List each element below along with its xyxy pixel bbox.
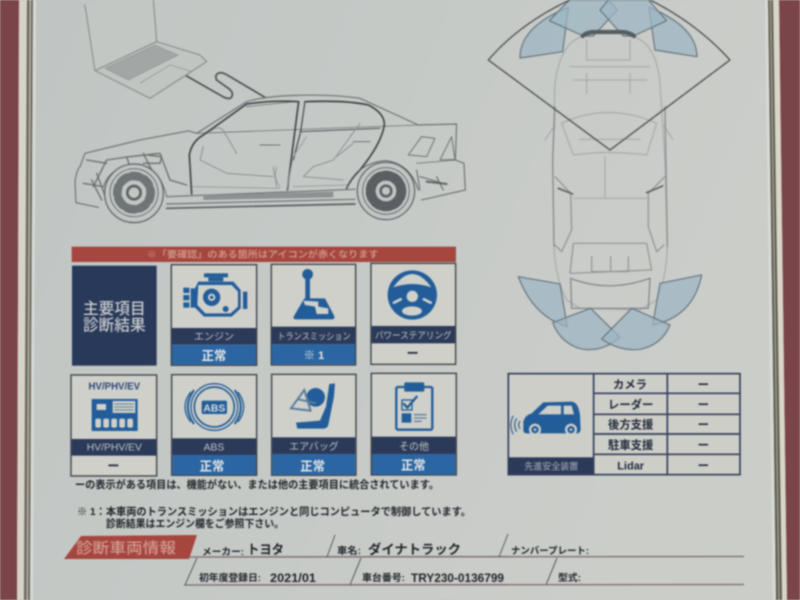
table row: parking assist — [608, 438, 709, 452]
icon: gear shifter — [293, 269, 335, 319]
icon: steering wheel — [388, 270, 437, 320]
note: transmission remark — [77, 505, 471, 530]
vehicle info: plate number: ナンバープレート: — [511, 546, 589, 557]
vehicle info: first registration — [199, 571, 316, 585]
tile: other — [371, 373, 456, 475]
tile: airbag — [272, 374, 356, 475]
vehicle info: maker: トヨタ — [247, 542, 284, 557]
label: advanced safety equipment — [509, 457, 594, 474]
tile: other: その他 — [399, 440, 429, 453]
table grid — [594, 374, 740, 475]
windshield bar — [583, 32, 634, 36]
table row: camera — [613, 378, 709, 391]
icon: car with sensor waves — [511, 402, 581, 436]
tile: HV/PHV/EV: HV/PHV/EV — [89, 382, 141, 393]
side view car with laptop — [75, 0, 465, 223]
red notice banner: ※「要確認」のある箇所はアイコンが赤くなります — [147, 248, 378, 259]
label: advanced safety equipment: 先進安全装置 — [524, 460, 578, 471]
table row: lidar: Lidar — [617, 461, 645, 473]
table row: rear assist: ー — [698, 420, 709, 432]
icon: laptop — [85, 0, 207, 98]
note: transmission remark: 診断結果はエンジン欄をご参照下さい。 — [106, 517, 284, 530]
door openings — [189, 101, 384, 194]
tile: power steering: パワーステアリング — [375, 330, 452, 341]
tile: transmission: ※ 1 — [304, 350, 324, 362]
table row: camera: カメラ — [613, 378, 647, 391]
table row: rear assist — [608, 418, 709, 432]
tile: HV/PHV/EV — [71, 375, 157, 476]
tile: power steering — [371, 263, 456, 364]
table row: parking assist: ー — [698, 440, 709, 452]
icon: engine — [183, 273, 247, 317]
table row: lidar — [617, 461, 709, 473]
tile: power steering: ー — [407, 346, 419, 360]
table row: camera: ー — [698, 379, 709, 391]
tile: airbag: 正常 — [300, 459, 325, 474]
interior seats and mechanics — [83, 123, 447, 200]
note: transmission remark: ※ 1：本車両のトランスミッションはエンジンと同じコンピュータで制御しています。 — [77, 505, 471, 518]
tile: engine: エンジン — [194, 332, 234, 343]
car top outline — [545, 37, 673, 310]
vehicle info tag: 診断車両情報 — [76, 540, 176, 557]
vehicle info: car name: ダイナトラック — [368, 542, 461, 557]
top view car with sensor coverage — [488, 0, 730, 350]
vehicle info: car name: 車名: — [337, 545, 361, 557]
tile: engine: 正常 — [202, 348, 226, 363]
vehicle info: first registration: 2021/01 — [270, 571, 316, 585]
tile: other: 正常 — [401, 457, 426, 472]
front sensor sectors — [520, 0, 697, 58]
table row: rear assist: 後方支援 — [608, 418, 654, 432]
tile: engine — [171, 265, 257, 365]
heading tile: main items: 診断結果 — [83, 317, 146, 335]
car body outline — [75, 95, 465, 208]
table row: lidar: ー — [698, 461, 709, 473]
tile: airbag: エアバッグ — [289, 440, 339, 453]
icon: battery unit — [92, 399, 138, 431]
rear sensor sectors — [518, 275, 702, 350]
table row: parking assist: 駐車支援 — [608, 438, 654, 452]
tile: transmission — [271, 264, 356, 365]
tile: HV/PHV/EV: HV/PHV/EV — [87, 443, 142, 454]
vehicle info: first registration: 初年度登録日: — [199, 572, 261, 584]
vehicle info tag — [64, 535, 197, 559]
frame: right edge — [765, 0, 800, 600]
vehicle info: maker — [202, 542, 284, 558]
icon: clipboard checklist — [396, 382, 432, 430]
advanced safety equipment table — [508, 374, 740, 475]
vehicle info: chassis number: TRY230-0136799 — [411, 571, 504, 585]
red notice banner — [72, 247, 456, 262]
tile: transmission: トランスミッション — [277, 332, 351, 342]
icon: ABS brake: ABS — [203, 403, 225, 414]
table row: radar: ー — [698, 399, 709, 411]
heading tile: main items — [72, 266, 157, 366]
table row: radar — [608, 397, 709, 411]
icon: airbag seat — [291, 383, 335, 429]
tile: ABS — [172, 375, 257, 475]
vehicle info: model: 型式: — [558, 572, 581, 584]
note: dash meaning: ーの表示がある項目は、機能がない、または他の主要項目に統合されています。 — [75, 478, 439, 491]
frame: left edge — [0, 0, 36, 600]
tile: ABS: 正常 — [200, 459, 224, 474]
rear wheel — [347, 161, 418, 220]
vehicle info: maker: メーカー: — [202, 547, 244, 558]
vehicle info: chassis number — [362, 571, 504, 585]
dashed coverage fan — [488, 0, 730, 150]
cable — [187, 73, 265, 99]
vehicle info form lines — [184, 534, 744, 585]
tile: HV/PHV/EV: ー — [107, 459, 119, 473]
vehicle info: chassis number: 車台番号: — [362, 572, 405, 584]
tile: ABS: ABS — [204, 443, 224, 454]
front wheel — [105, 164, 163, 223]
diagnosis results panel — [71, 247, 456, 476]
heading tile: main items: 主要項目 — [83, 300, 146, 318]
table row: radar: レーダー — [608, 397, 653, 411]
